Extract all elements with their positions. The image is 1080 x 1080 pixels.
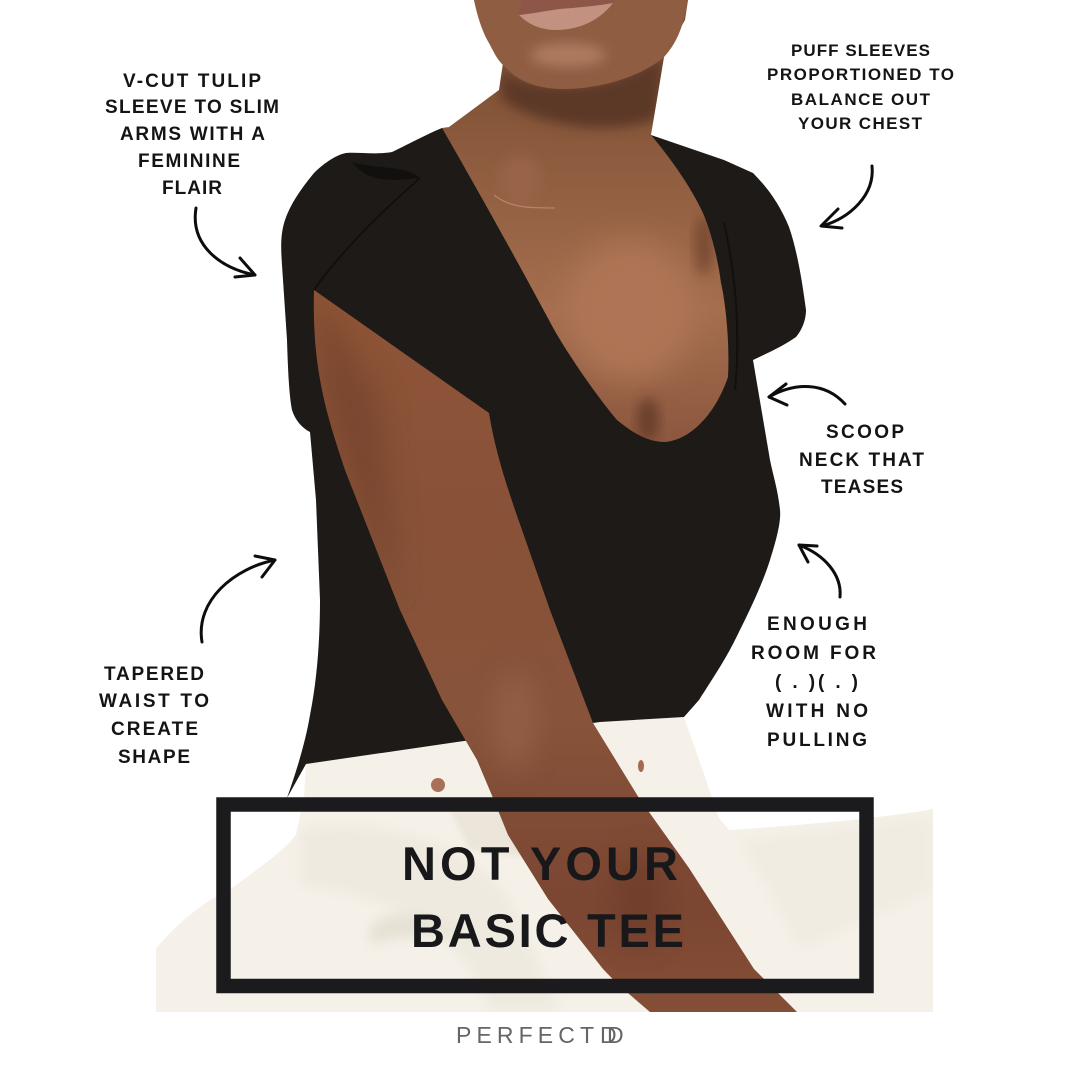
neck and chest [442,0,728,442]
callout: v-cut tulip sleeve: V-CUT TULIP [123,71,261,92]
callout: enough room: PULLING [767,730,867,751]
shadow under the jaw [500,55,664,128]
callout: tapered waist [99,664,209,768]
callout: enough room: ( . )( . ) [775,672,858,693]
photo: model in black tee and white jeans [156,0,933,1012]
lips [519,0,616,30]
jeans buttons [431,760,644,792]
callout: puff sleeves: PROPORTIONED TO [767,65,954,84]
title: not your basic tee: BASIC TEE [411,904,684,957]
callout: puff sleeves: PUFF SLEEVES [791,41,930,60]
arm [314,290,797,1012]
callout: v-cut tulip sleeve: FLAIR [162,178,222,199]
callout: puff sleeves: BALANCE OUT [791,90,931,109]
callout: scoop neck: TEASES [821,477,903,498]
callout: v-cut tulip sleeve: FEMININE [138,151,240,172]
chest shading [565,240,695,380]
callout: v-cut tulip sleeve [105,71,279,199]
callout: puff sleeves: YOUR CHEST [798,114,923,133]
arrow: to puff sleeve [821,166,872,228]
chin and jaw [474,0,688,89]
arrow: to waist [201,556,275,642]
title: not your basic tee [402,837,684,957]
callout: tapered waist: TAPERED [104,664,204,685]
white jeans [156,717,933,1012]
callout: enough room: WITH NO [766,701,868,722]
title frame [224,804,866,986]
callout: tapered waist: WAIST TO [99,691,209,712]
black tee [281,128,806,798]
logo: perfectdd: D [600,1022,617,1048]
pale gap under the right sleeve [716,325,722,345]
callout: puff sleeves [767,41,954,133]
callout: scoop neck: NECK THAT [799,450,924,471]
callout: tapered waist: SHAPE [118,747,190,768]
callout: v-cut tulip sleeve: ARMS WITH A [120,124,265,145]
arrow: to scoop neck [769,384,845,405]
logo: perfectdd: PERFECT [456,1022,594,1048]
callout: enough room: ROOM FOR [751,643,876,664]
callout: v-cut tulip sleeve: SLEEVE TO SLIM [105,97,279,118]
callout: enough room [751,614,876,751]
arrow: to bust [799,545,840,597]
callout: scoop neck [799,422,924,498]
title: not your basic tee: NOT YOUR [402,837,678,890]
callout: scoop neck: SCOOP [826,422,904,443]
arrow: to tulip sleeve [195,208,255,277]
logo: perfectdd: D [607,1022,624,1048]
callout: tapered waist: CREATE [111,719,198,740]
callout: enough room: ENOUGH [767,614,867,635]
